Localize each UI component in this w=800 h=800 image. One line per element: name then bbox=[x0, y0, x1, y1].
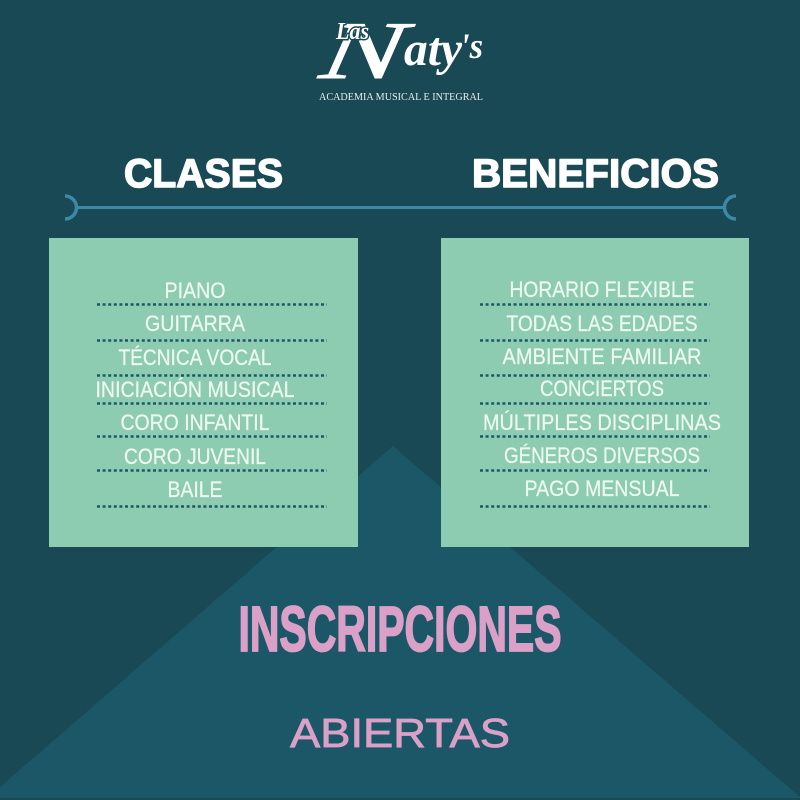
benefits list: HORARIO FLEXIBLE bbox=[510, 277, 694, 302]
logo: tagline: ACADEMIA MUSICAL E INTEGRAL bbox=[319, 91, 483, 103]
class list: INICIACIÓN MUSICAL bbox=[96, 377, 294, 402]
panel: beneficios bbox=[441, 238, 749, 547]
class list: GUITARRA bbox=[145, 311, 245, 336]
logo: apostrophe s: 's bbox=[460, 26, 483, 66]
heading: clases: CLASES bbox=[124, 152, 283, 196]
logo: N: N bbox=[313, 5, 419, 96]
benefits list: CONCIERTOS bbox=[540, 376, 664, 401]
benefits list: TODAS LAS EDADES bbox=[506, 311, 698, 336]
benefits list: AMBIENTE FAMILIAR bbox=[502, 344, 702, 369]
subheadline: abiertas: ABIERTAS bbox=[290, 710, 510, 756]
panel background bbox=[441, 238, 749, 547]
divider with end caps bbox=[65, 196, 736, 219]
class list: CORO JUVENIL bbox=[124, 444, 266, 469]
benefits list bbox=[483, 277, 721, 501]
benefits list: MÚLTIPLES DISCIPLINAS bbox=[483, 410, 721, 435]
logo: Las: Las bbox=[335, 19, 369, 45]
class list: PIANO bbox=[164, 278, 226, 303]
class list: CORO INFANTIL bbox=[120, 410, 270, 435]
dotted separators bbox=[97, 304, 327, 506]
dotted separators bbox=[480, 304, 710, 506]
background triangle bbox=[0, 446, 800, 798]
class list: TÉCNICA VOCAL bbox=[118, 345, 272, 370]
logo bbox=[313, 5, 483, 103]
benefits list: PAGO MENSUAL bbox=[524, 476, 680, 501]
panel: clases bbox=[49, 238, 358, 547]
class list: BAILE bbox=[168, 477, 222, 502]
class list bbox=[96, 278, 294, 502]
logo: aty: aty bbox=[404, 23, 463, 76]
panel background bbox=[49, 238, 358, 547]
benefits list: GÉNEROS DIVERSOS bbox=[504, 443, 700, 468]
heading: beneficios: BENEFICIOS bbox=[472, 152, 719, 196]
headline: inscripciones: INSCRIPCIONES bbox=[238, 593, 562, 665]
